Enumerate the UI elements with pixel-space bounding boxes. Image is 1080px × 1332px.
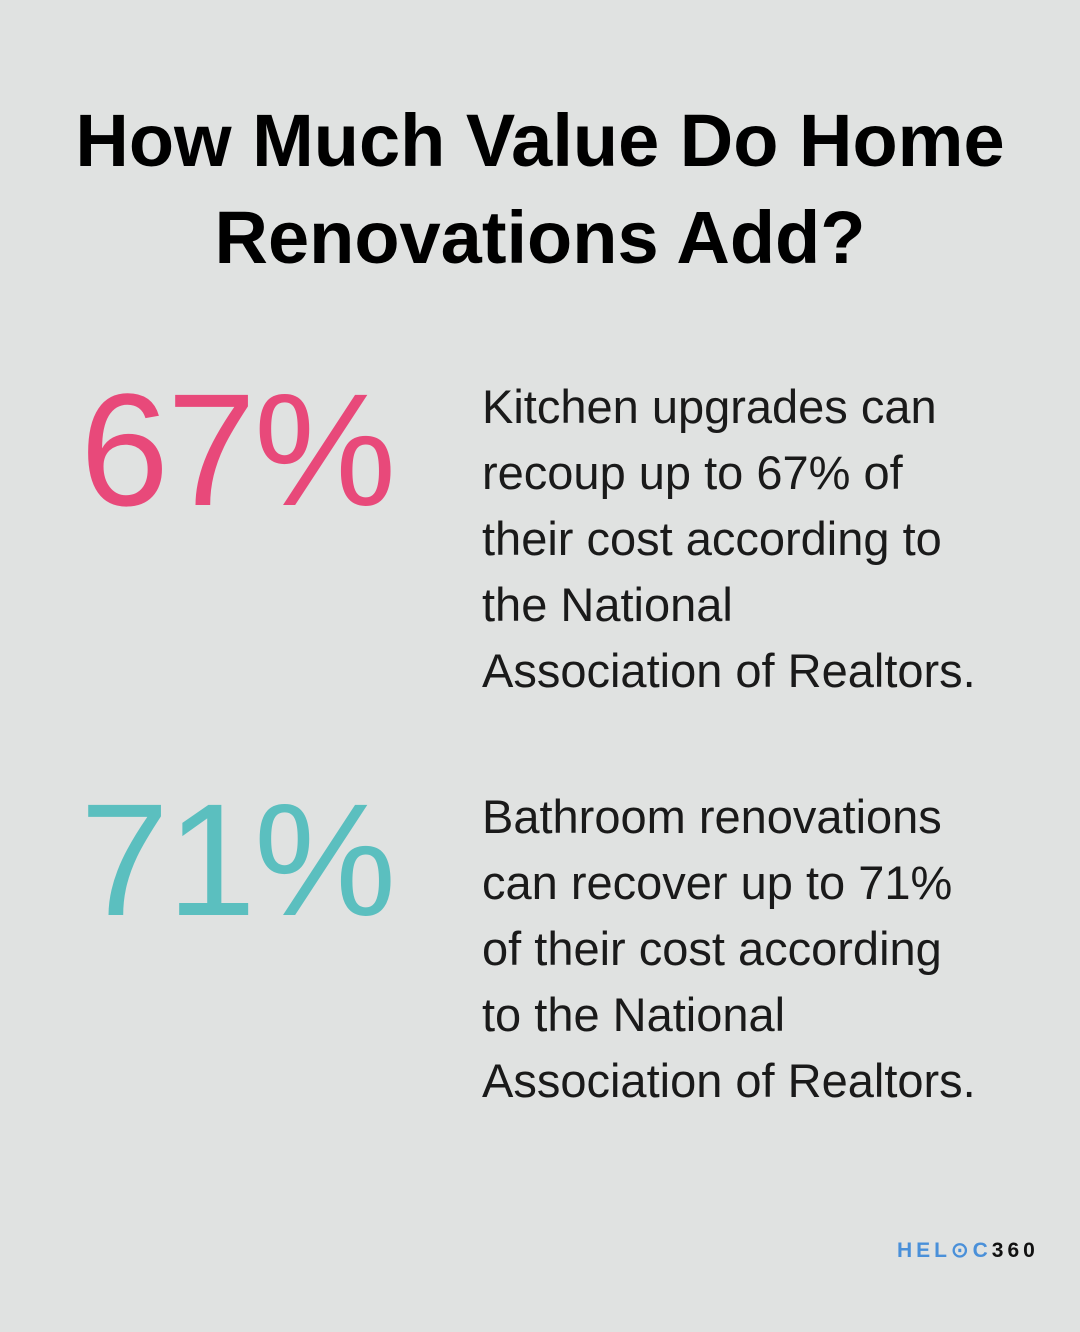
title bbox=[75, 99, 1005, 279]
stat: bathroom 71%: 71% bbox=[80, 770, 394, 949]
title: How Much Value Do Home bbox=[75, 99, 1005, 182]
text: bathroom description: to the National bbox=[482, 988, 785, 1041]
text: kitchen description: Association of Realtors. bbox=[482, 644, 976, 697]
text: bathroom description: can recover up to 71% bbox=[482, 856, 952, 909]
text: kitchen description: their cost according to bbox=[482, 512, 942, 565]
title: Renovations Add? bbox=[215, 196, 865, 279]
text: kitchen description: the National bbox=[482, 578, 733, 631]
text: bathroom description bbox=[482, 790, 976, 1107]
text: bathroom description: Bathroom renovations bbox=[482, 790, 942, 843]
text: kitchen description: Kitchen upgrades can bbox=[482, 380, 937, 433]
text: bathroom description: Association of Realtors. bbox=[482, 1054, 976, 1107]
stat: kitchen 67%: 67% bbox=[80, 360, 394, 539]
text: bathroom description: of their cost according bbox=[482, 922, 942, 975]
logo: HEL⊙C360 bbox=[897, 1239, 1039, 1262]
text: kitchen description: recoup up to 67% of bbox=[482, 446, 903, 499]
text: kitchen description bbox=[482, 380, 976, 697]
